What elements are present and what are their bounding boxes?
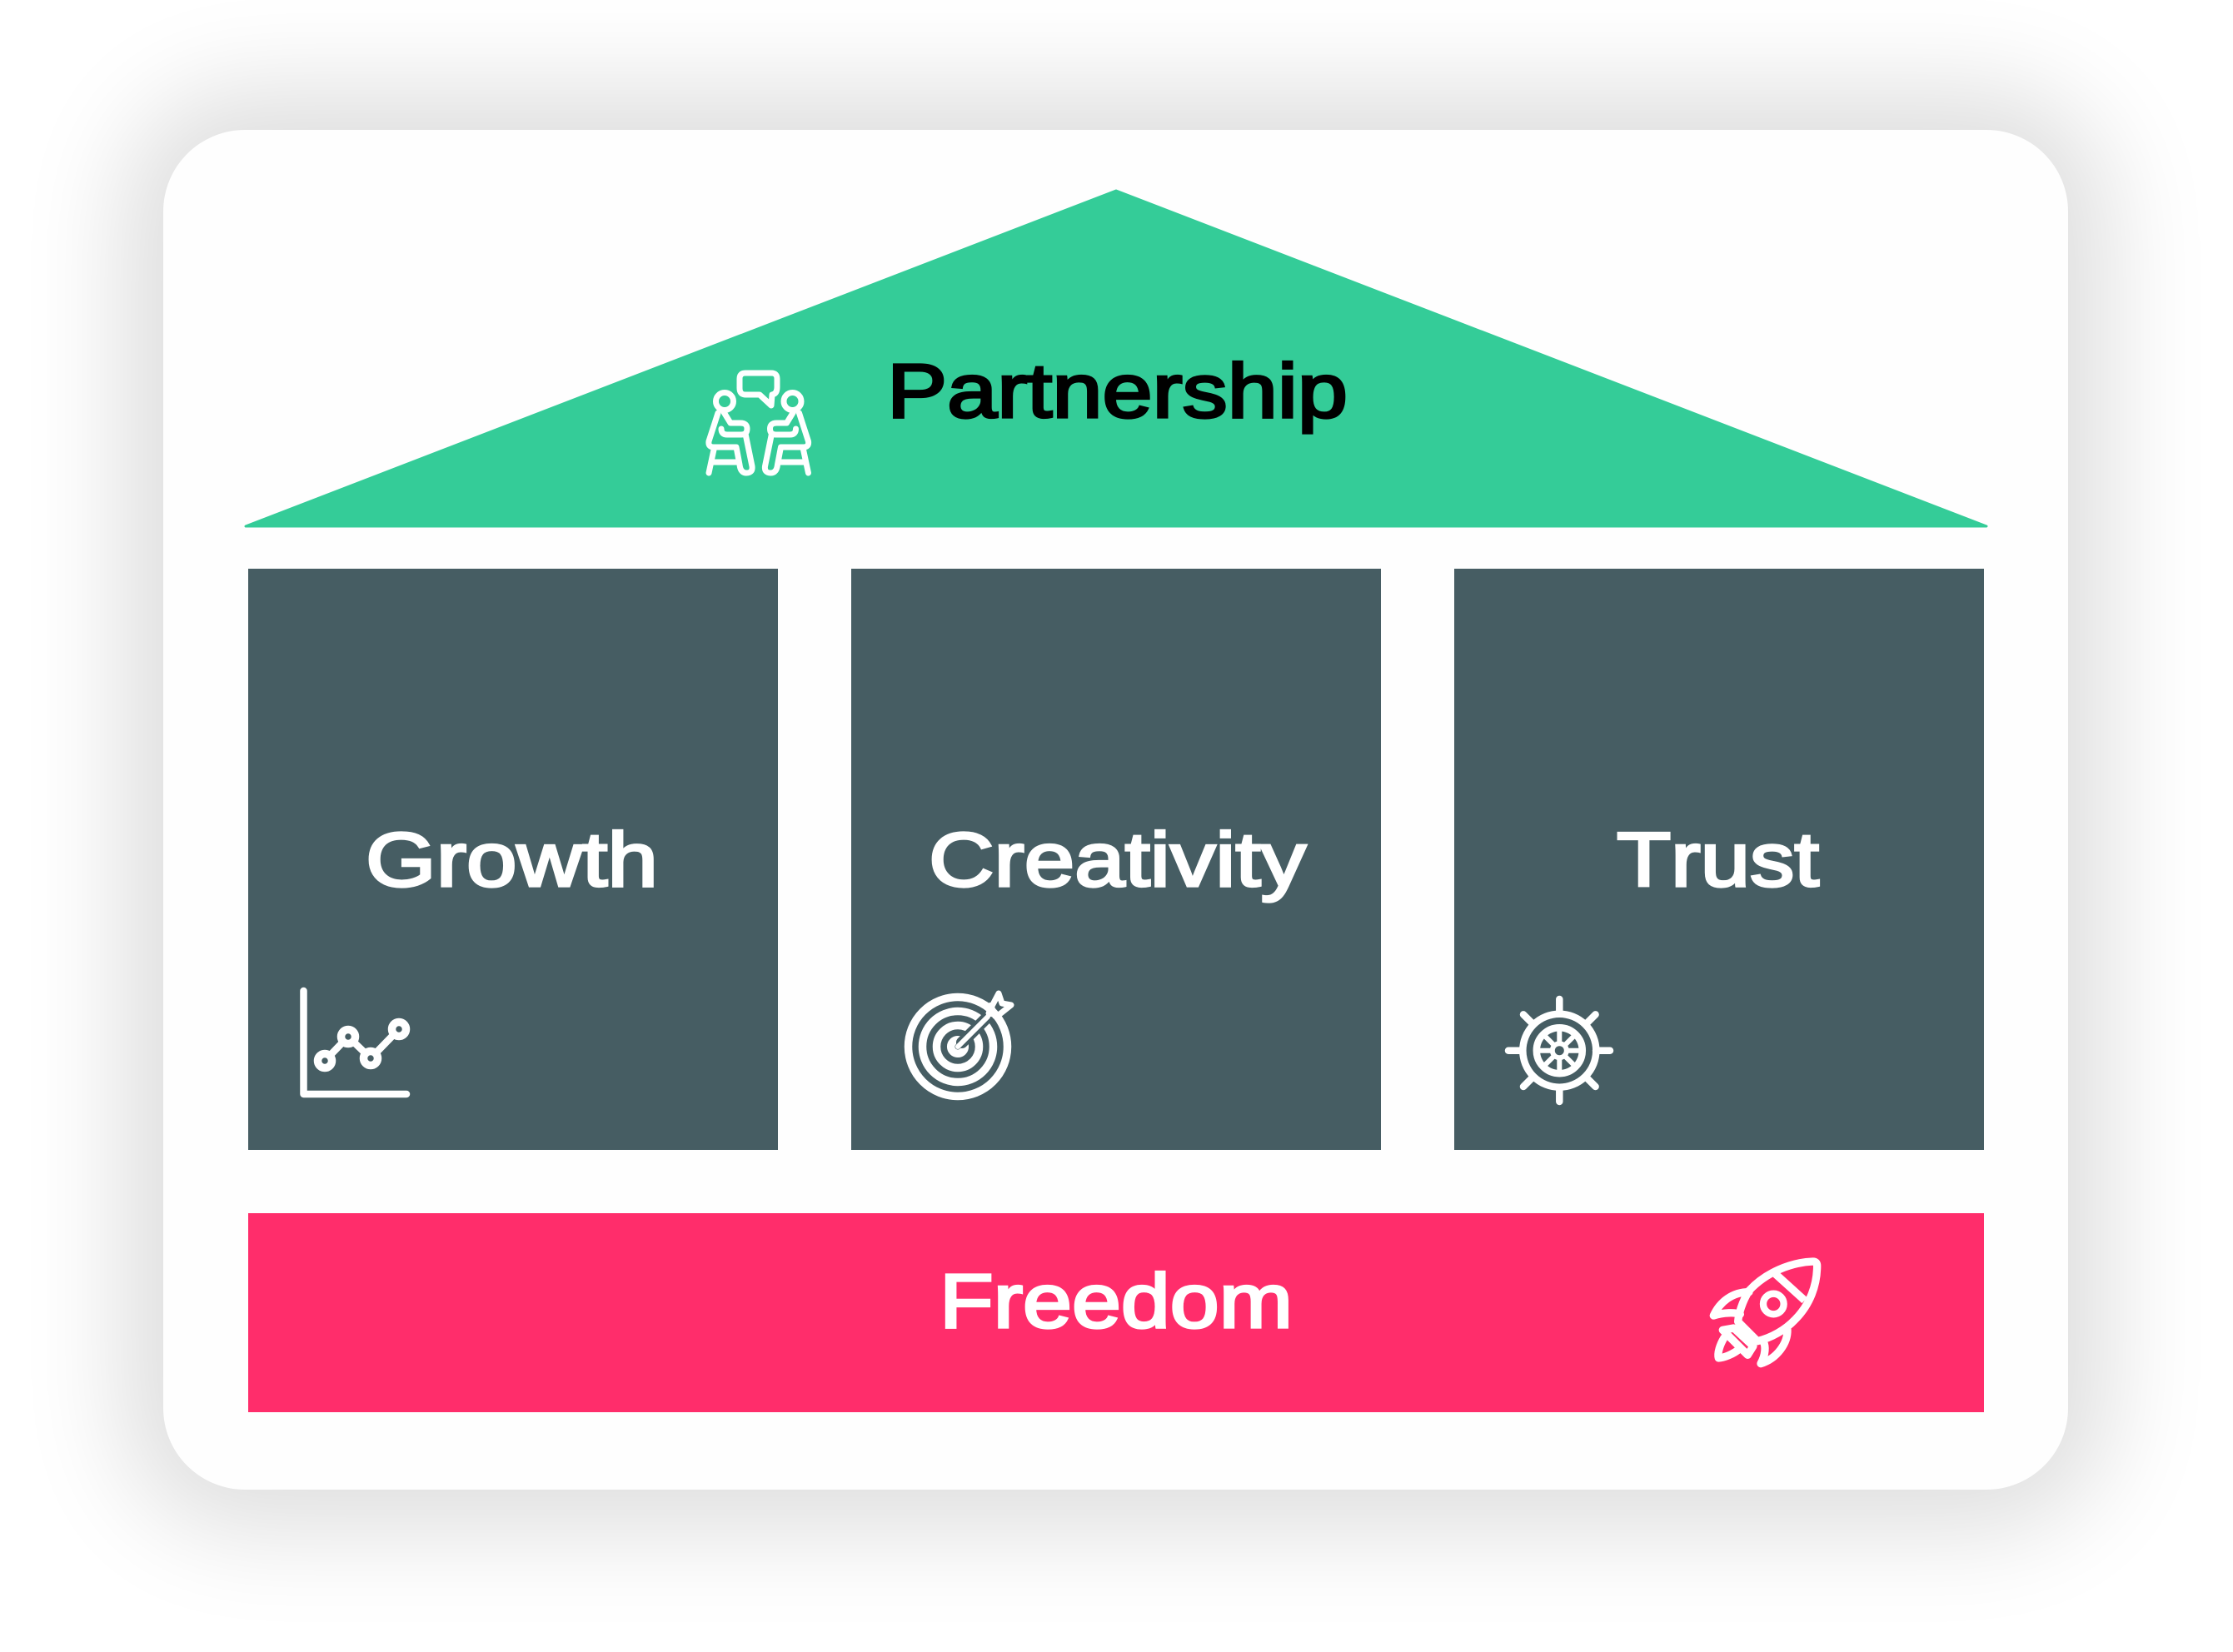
- icon: target with arrow: [908, 993, 1011, 1096]
- heading: Partnership: Partnership: [887, 349, 1348, 434]
- icon: ship wheel: [1508, 999, 1610, 1102]
- card with soft shadow: [163, 130, 2068, 1490]
- panel: pillar Trust: [1454, 569, 1984, 1150]
- roof triangle: [246, 191, 1986, 526]
- heading: Growth: Growth: [366, 818, 658, 903]
- heading: Trust: Trust: [1617, 818, 1819, 903]
- heading: Creativity: Creativity: [929, 818, 1306, 903]
- panel: pillar Creativity: [851, 569, 1381, 1150]
- foundation bar: [248, 1213, 1984, 1412]
- heading: Freedom: Freedom: [940, 1259, 1293, 1344]
- pillar rectangle: [851, 569, 1381, 1150]
- pillar rectangle: [248, 569, 778, 1150]
- icon: line chart: [303, 991, 406, 1094]
- panel: pillar Growth: [248, 569, 778, 1150]
- panel: roof Partnership: [246, 191, 1986, 526]
- pillar rectangle: [1454, 569, 1984, 1150]
- panel: foundation Freedom: [248, 1213, 1984, 1412]
- icon: rocket: [1713, 1261, 1817, 1364]
- icon: two people talking: [709, 373, 809, 473]
